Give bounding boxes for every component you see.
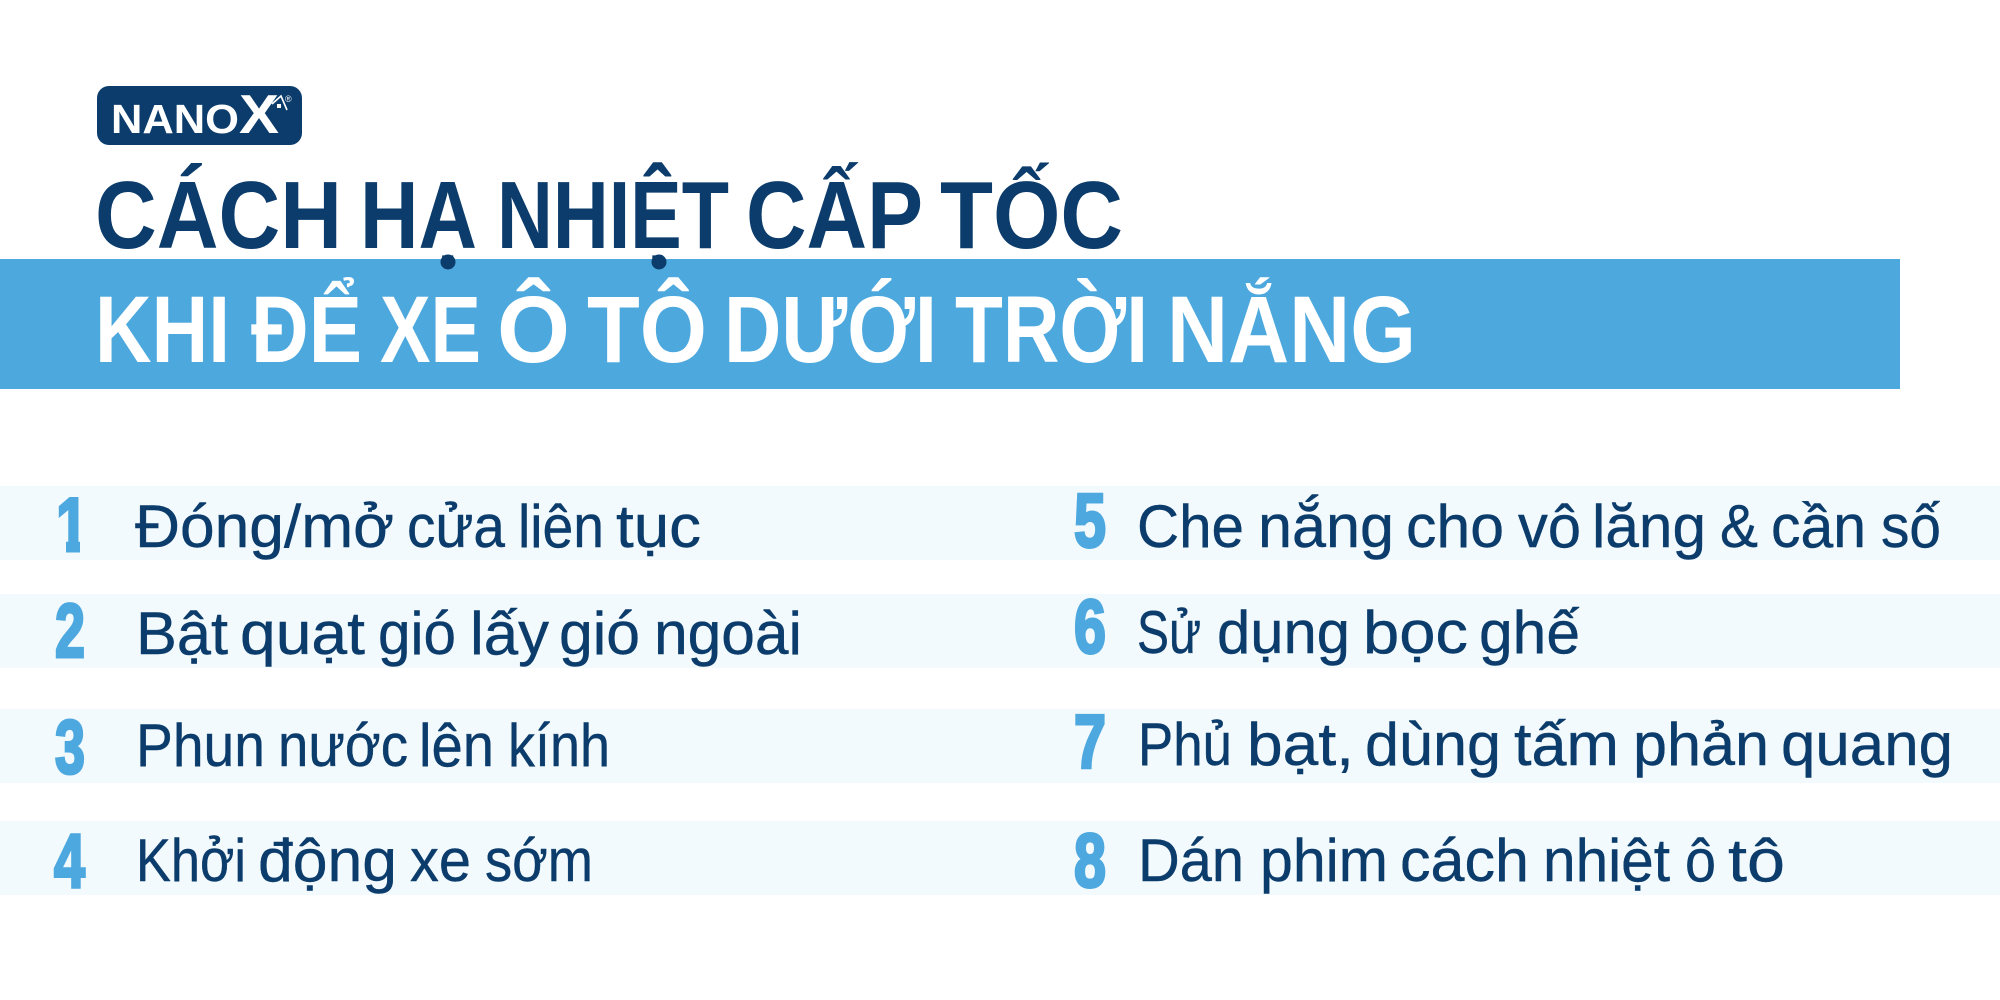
heading line 1: TỐC (940, 161, 1123, 269)
row 3: kính (508, 712, 610, 779)
row 5: cần (1771, 493, 1866, 560)
logo: NanoX: X (239, 83, 279, 145)
row 5: lăng (1592, 493, 1706, 560)
heading line 2: DƯỚI (724, 277, 937, 383)
row 1 (0, 486, 1000, 560)
row 8 (1000, 819, 2000, 904)
heading line 2: NẮNG (1167, 276, 1416, 383)
row 1: 1 (56, 483, 88, 568)
row 2: quạt (240, 600, 365, 667)
row 7: Phủ (1138, 711, 1232, 778)
row 7: quang (1781, 711, 1953, 778)
row 2: 2 (55, 589, 85, 674)
row 7: dùng (1365, 711, 1501, 778)
heading line 2: Ô (497, 277, 570, 383)
row 5 (1000, 479, 2000, 564)
row 3: 3 (55, 705, 85, 790)
row 5: & (1720, 493, 1758, 560)
row 7: tấm (1514, 711, 1619, 778)
row 4: Khởi (136, 827, 246, 894)
row 3: nước (278, 712, 408, 779)
row 7: bạt, (1247, 711, 1354, 778)
row 3: lên (419, 712, 494, 779)
row 5: vô (1518, 493, 1581, 560)
heading line 2: ĐỂ (251, 277, 362, 383)
row 8: 8 (1074, 819, 1106, 904)
row 6 (1000, 585, 2000, 670)
row 8: Dán (1138, 827, 1244, 894)
heading line 2: KHI (95, 277, 230, 383)
row 4 (0, 819, 1000, 904)
row 2: gió (559, 600, 640, 667)
row 1: Đóng/mở (135, 493, 394, 560)
heading line 1: CÁCH (95, 162, 342, 269)
row 1: liên (518, 493, 604, 560)
row 2: Bật (136, 600, 228, 667)
row 5: số (1881, 493, 1941, 560)
row 8: nhiệt (1543, 827, 1670, 894)
heading line 1: HẠ (360, 162, 477, 269)
row 4: 4 (54, 819, 85, 904)
logo: NanoX (97, 83, 302, 145)
row 6: bọc (1363, 599, 1468, 666)
row 3: Phun (136, 712, 265, 779)
row 2: gió (378, 600, 456, 667)
title band (0, 259, 1900, 389)
row 2: lấy (470, 600, 549, 667)
heading line 2: XE (380, 277, 481, 383)
heading line 2: TÔ (587, 277, 707, 383)
row 3 (0, 705, 1000, 790)
row 6: ghế (1479, 599, 1580, 666)
row 4: xe (410, 827, 471, 894)
row 8: phim (1260, 827, 1388, 894)
row 7: 7 (1074, 700, 1106, 785)
row 2: ngoài (654, 600, 802, 667)
logo: NanoX: ® (285, 94, 292, 104)
row 2 (0, 589, 1000, 674)
row 5: nắng (1258, 493, 1394, 560)
row 8: cách (1400, 827, 1529, 894)
row 5: 5 (1074, 479, 1106, 564)
row 8: tô (1728, 827, 1785, 894)
row 5: cho (1406, 493, 1504, 560)
row 8: ô (1685, 827, 1716, 894)
heading line 1 (95, 161, 1123, 270)
row 4: sớm (485, 827, 593, 894)
row 6: Sử (1137, 599, 1201, 666)
row 6: 6 (1074, 585, 1106, 670)
heading line 1: CẤP (746, 161, 923, 269)
row 7: phản (1633, 711, 1769, 778)
logo: NanoX: NANO (111, 96, 239, 142)
row 6: dụng (1217, 599, 1350, 666)
row 7 (1000, 700, 2000, 785)
row 1: cửa (407, 493, 506, 560)
heading line 2: TRỜI (955, 277, 1148, 383)
row 4: động (258, 827, 397, 894)
row 1: tục (616, 493, 701, 560)
row 5: Che (1137, 493, 1244, 560)
heading line 2 (95, 276, 1416, 383)
heading line 1: NHIỆT (497, 161, 729, 269)
